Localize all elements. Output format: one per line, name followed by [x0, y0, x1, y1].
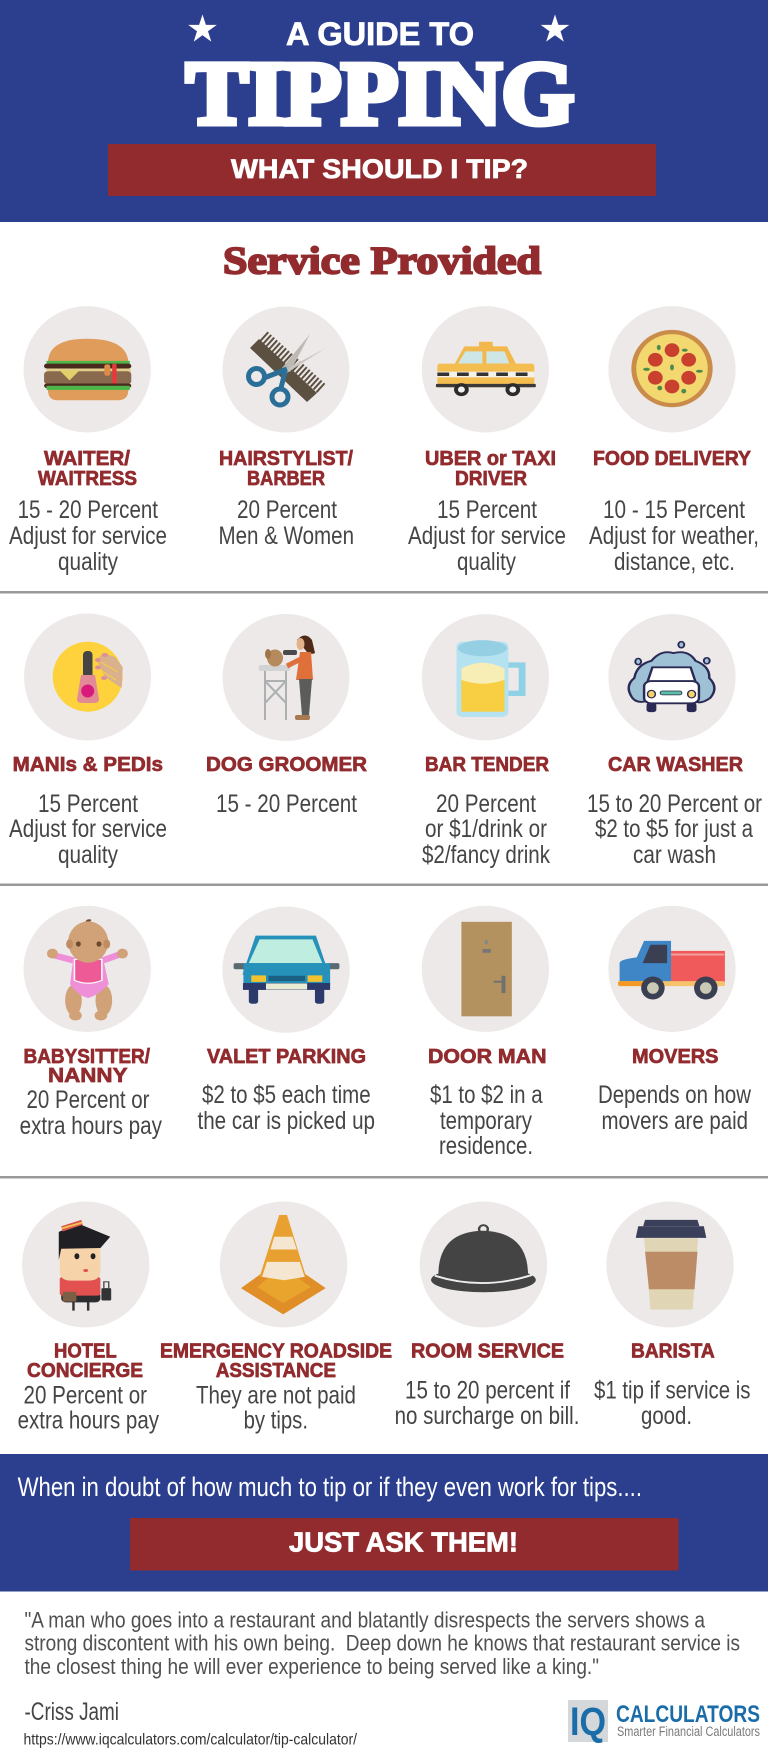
panel: babysitter: [20, 906, 162, 1140]
icon: traffic cone: [220, 1202, 347, 1328]
tip text: [408, 496, 566, 576]
subtitle banner: [108, 144, 656, 196]
quote: the closest thing he will ever experience to being served like a king.": [24, 1654, 599, 1679]
panel: car washer: [587, 614, 762, 869]
icon: pizza: [608, 306, 736, 432]
label: [219, 448, 353, 490]
label: [425, 448, 556, 490]
label: FOOD DELIVERY: [593, 448, 752, 470]
panel: dog groomer: [206, 614, 368, 818]
label: [27, 1340, 143, 1382]
tip text: $2 to $5 each time: [202, 1081, 371, 1109]
tip text: car wash: [633, 841, 716, 869]
callout button: [130, 1518, 678, 1570]
tip text: 15 - 20 Percent: [18, 496, 158, 524]
tip text: [430, 1081, 543, 1160]
tip text: [218, 496, 354, 550]
panel: roadside assistance: [160, 1202, 392, 1435]
logo: iq calculators: IQ: [570, 1700, 606, 1744]
tip text: [587, 790, 762, 869]
panel: food delivery: [589, 306, 759, 576]
label: CONCIERGE: [27, 1360, 143, 1382]
heading: service provided: Service Provided: [223, 240, 541, 282]
tip text: They are not paid: [196, 1382, 356, 1410]
tip text: 20 Percent or: [26, 1086, 150, 1114]
tip text: $1 to $2 in a: [430, 1081, 543, 1109]
tip text: by tips.: [244, 1407, 308, 1435]
label: [160, 1340, 392, 1382]
label: [24, 1046, 150, 1087]
quote attribution: -Criss Jami: [24, 1698, 119, 1726]
tip text: or $1/drink or: [425, 815, 547, 843]
icon: burger: [24, 306, 151, 432]
title: a guide to: A GUIDE TO: [286, 16, 474, 52]
tip text: no surcharge on bill.: [395, 1402, 579, 1430]
icon: bellhop: [22, 1202, 149, 1328]
tip text: 20 Percent: [436, 790, 536, 818]
logo: iq calculators: [568, 1700, 760, 1744]
subtitle banner: WHAT SHOULD I TIP?: [231, 154, 528, 184]
quote: [24, 1607, 740, 1679]
tip text: quality: [58, 548, 118, 576]
panel: movers: [598, 906, 752, 1135]
icon: right star: [541, 14, 569, 42]
label: DOG GROOMER: [206, 754, 368, 776]
tip text: [18, 1382, 159, 1435]
callout button: JUST ASK THEM!: [289, 1527, 518, 1558]
label: ROOM SERVICE: [411, 1340, 564, 1362]
label: ASSISTANCE: [216, 1360, 336, 1382]
tip text: [20, 1086, 162, 1140]
tip text: quality: [58, 841, 118, 869]
tip text: 20 Percent or: [24, 1382, 147, 1410]
label: WAITER/: [44, 448, 130, 470]
icon: groomer and dog: [222, 614, 350, 741]
tip text: [422, 790, 550, 869]
label: MANIs & PEDIs: [13, 754, 163, 776]
panel: taxi: [408, 306, 566, 576]
tip text: [9, 790, 167, 869]
panel: manicure: [9, 614, 167, 869]
icon: baby: [24, 906, 151, 1032]
icon: truck: [608, 906, 736, 1032]
label: BARBER: [247, 468, 326, 490]
label: DRIVER: [455, 468, 528, 490]
icon: comb and scissors: [222, 306, 350, 432]
icon: nail polish: [24, 614, 151, 740]
label: DOOR MAN: [428, 1046, 546, 1068]
tip text: Adjust for service: [9, 522, 167, 550]
panel: header banner: [0, 0, 768, 222]
label: EMERGENCY ROADSIDE: [160, 1340, 392, 1362]
icon: cloche: [420, 1202, 547, 1328]
title: tipping: TIPPING: [186, 45, 574, 144]
tip text: 20 Percent: [237, 496, 337, 524]
tip text: residence.: [439, 1132, 533, 1160]
tip text: good.: [641, 1402, 692, 1430]
tip text: $2/fancy drink: [422, 841, 550, 869]
tip text: [589, 496, 759, 576]
label: BABYSITTER/: [24, 1046, 150, 1068]
panel: hotel concierge: [18, 1202, 159, 1435]
label: [38, 448, 137, 490]
tip text: 15 Percent: [38, 790, 138, 818]
tip text: [9, 496, 167, 576]
label: HOTEL: [54, 1340, 117, 1362]
label: MOVERS: [632, 1046, 718, 1068]
panel: just ask them banner: [0, 1454, 768, 1592]
panel: valet parking: [198, 906, 375, 1135]
tip text: the car is picked up: [198, 1107, 375, 1135]
label: BARISTA: [631, 1340, 715, 1362]
tip text: Adjust for service: [9, 815, 167, 843]
label: WAITRESS: [38, 468, 137, 490]
tip text: extra hours pay: [18, 1407, 159, 1435]
tip text: extra hours pay: [20, 1112, 162, 1140]
tip text: 15 to 20 percent if: [405, 1377, 570, 1405]
panel: hairstylist: [218, 306, 354, 550]
label: CAR WASHER: [608, 754, 744, 776]
icon: car wash: [608, 614, 736, 740]
callout text: When in doubt of how much to tip or if they even work for tips....: [18, 1472, 642, 1502]
icon: blue car: [222, 906, 350, 1033]
tip text: distance, etc.: [614, 548, 735, 576]
label: HAIRSTYLIST/: [219, 448, 353, 470]
tip text: [594, 1377, 750, 1430]
icon: door: [422, 906, 549, 1032]
tip text: 15 - 20 Percent: [216, 790, 357, 818]
icon: beer mug: [422, 614, 549, 740]
tip text: [198, 1081, 375, 1135]
tip text: [196, 1382, 356, 1435]
tip text: [598, 1081, 752, 1135]
label: UBER or TAXI: [425, 448, 556, 470]
tip text: 15 Percent: [437, 496, 537, 524]
tip text: quality: [457, 548, 516, 576]
panel: barista: [594, 1202, 750, 1430]
tip text: Men & Women: [218, 522, 354, 550]
panel: waiter: [9, 306, 167, 576]
icon: left star: [188, 14, 217, 42]
label: VALET PARKING: [207, 1046, 366, 1068]
tip text: [395, 1377, 579, 1430]
panel: bartender: [422, 614, 550, 869]
tip text: Adjust for service: [408, 522, 566, 550]
tip text: temporary: [440, 1107, 532, 1135]
panel: room service: [395, 1202, 579, 1430]
source url: https://www.iqcalculators.com/calculator/tip-calculator/: [24, 1731, 357, 1748]
label: NANNY: [48, 1065, 128, 1087]
icon: taxi: [422, 306, 549, 432]
panel: door man: [422, 906, 549, 1160]
icon: coffee cup: [606, 1202, 734, 1328]
label: BAR TENDER: [425, 754, 550, 776]
